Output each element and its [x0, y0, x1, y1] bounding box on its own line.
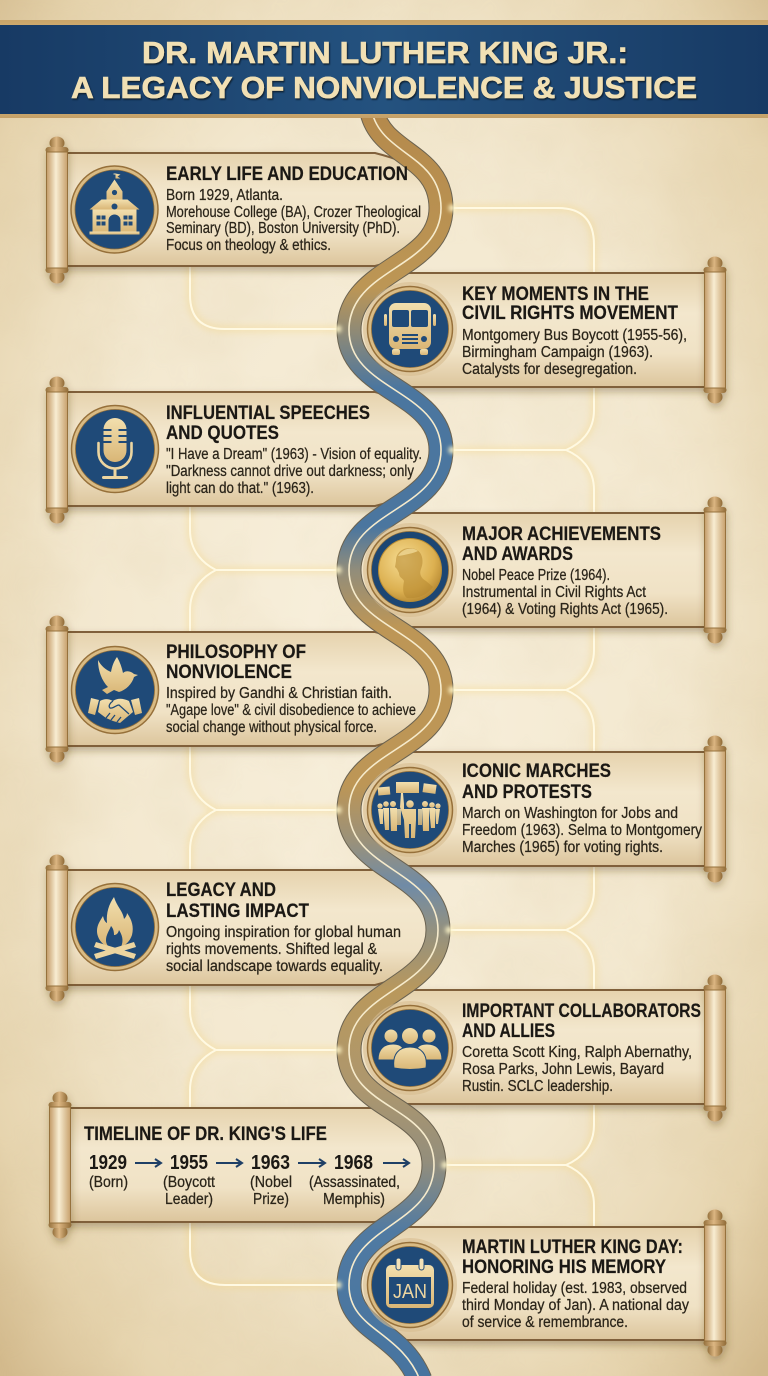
text: achievements: Instrumental in Civil Rights Act — [462, 584, 647, 601]
title text: DR. MARTIN LUTHER KING JR.: — [142, 35, 628, 70]
icon: group of people — [363, 1001, 457, 1095]
icon: flame — [72, 884, 158, 970]
text: philosophy: social change without physical force. — [166, 719, 377, 736]
text: legacy: LEGACY AND — [166, 880, 276, 901]
panel: timeline scroll — [62, 1108, 434, 1222]
timeline labels: (Nobel — [250, 1174, 292, 1191]
timeline heading: TIMELINE OF DR. KING'S LIFE — [84, 1124, 327, 1145]
panel: achievements scroll — [349, 513, 716, 627]
panel: philosophy scroll — [60, 632, 441, 746]
section: legacy and lasting impact — [72, 880, 401, 975]
timeline labels — [89, 1174, 400, 1208]
timeline labels: (Boycott — [163, 1174, 216, 1191]
title text: A LEGACY OF NONVIOLENCE & JUSTICE — [71, 70, 697, 105]
text: speeches — [166, 403, 422, 497]
timeline years — [89, 1151, 373, 1174]
icon: schoolhouse — [71, 166, 158, 253]
icon: bus — [363, 282, 457, 376]
section: marches and protests — [363, 761, 702, 857]
text: marches — [462, 761, 702, 856]
text: marches: March on Washington for Jobs and — [462, 805, 678, 822]
icon: nobel medal — [363, 523, 457, 617]
text: collaborators: IMPORTANT COLLABORATORS — [462, 1001, 701, 1022]
text: legacy: social landscape towards equality. — [166, 958, 383, 975]
panel: marches scroll — [349, 752, 716, 866]
text: collaborators — [462, 1001, 701, 1095]
text: MLK day: Federal holiday (est. 1983, observed — [462, 1280, 687, 1297]
timeline years: 1955 — [170, 1151, 208, 1174]
timeline labels: (Born) — [89, 1174, 128, 1191]
text: early life: Focus on theology & ethics. — [166, 237, 331, 254]
text: philosophy — [166, 642, 416, 736]
timeline labels: Memphis) — [323, 1191, 385, 1208]
text: speeches: AND QUOTES — [166, 423, 279, 444]
icon: January calendar: JAN — [393, 1281, 427, 1303]
text: early life — [166, 164, 421, 254]
section: speeches and quotes — [72, 403, 422, 497]
text: speeches: "I Have a Dream" (1963) - Vision of equality. — [166, 446, 422, 463]
timeline labels: Prize) — [253, 1191, 289, 1208]
text: MLK day: of service & remembrance. — [462, 1314, 628, 1331]
text: speeches: light can do that." (1963). — [166, 480, 314, 497]
icon: microphone — [72, 406, 158, 492]
text: philosophy: PHILOSOPHY OF — [166, 642, 306, 663]
section: key moments — [363, 282, 687, 378]
text: achievements: Nobel Peace Prize (1964). — [462, 567, 610, 584]
section: philosophy of nonviolence — [72, 642, 416, 736]
timeline years: 1929 — [89, 1151, 127, 1174]
text: early life: Seminary (BD), Boston University (PhD). — [166, 220, 400, 237]
timeline arrows — [135, 1159, 409, 1167]
panel: collaborators scroll — [349, 990, 716, 1104]
text: key moments: Birmingham Campaign (1963). — [462, 344, 653, 361]
text: philosophy: NONVIOLENCE — [166, 662, 292, 683]
scroll panels backgrounds — [60, 153, 716, 1340]
text: key moments: KEY MOMENTS IN THE — [462, 284, 649, 305]
timeline years: 1963 — [251, 1151, 290, 1174]
section: early life and education — [71, 164, 421, 254]
scroll rods — [46, 136, 726, 1356]
panel: legacy scroll — [60, 870, 438, 985]
icon: protest crowd — [363, 763, 457, 857]
panel: key moments scroll — [349, 273, 716, 387]
text: marches: AND PROTESTS — [462, 782, 592, 803]
text: legacy: rights movements. Shifted legal & — [166, 941, 378, 958]
winding road — [349, 112, 441, 1376]
text: collaborators: Rosa Parks, John Lewis, Bayard — [462, 1061, 664, 1078]
text: collaborators: Rustin. SCLC leadership. — [462, 1078, 613, 1095]
timeline labels: (Assassinated, — [309, 1174, 400, 1191]
text: MLK day — [462, 1237, 689, 1331]
icon: January calendar — [363, 1238, 457, 1332]
text: key moments — [462, 284, 687, 378]
timeline years: 1968 — [334, 1151, 373, 1174]
text: MLK day: third Monday of Jan). A national day — [462, 1297, 689, 1314]
text: early life: Born 1929, Atlanta. — [166, 187, 283, 204]
text: philosophy: Inspired by Gandhi & Christian faith. — [166, 685, 392, 702]
panel: speeches scroll — [60, 392, 441, 506]
section: timeline — [84, 1124, 409, 1208]
icon: dove and handshake — [72, 646, 158, 734]
text: legacy: Ongoing inspiration for global human — [166, 924, 401, 941]
text: achievements: MAJOR ACHIEVEMENTS — [462, 524, 661, 545]
text: philosophy: "Agape love" & civil disobedience to achieve — [166, 702, 416, 719]
section: collaborators and allies — [363, 1001, 701, 1095]
panel: early life scroll — [60, 153, 441, 266]
text: key moments: CIVIL RIGHTS MOVEMENT — [462, 303, 678, 324]
text: legacy: LASTING IMPACT — [166, 901, 309, 922]
text: speeches: "Darkness cannot drive out darkness; only — [166, 463, 414, 480]
text: marches: Freedom (1963). Selma to Montgomery — [462, 822, 702, 839]
text: collaborators: Coretta Scott King, Ralph Abernathy, — [462, 1044, 692, 1061]
text: MLK day: MARTIN LUTHER KING DAY: — [462, 1237, 683, 1258]
section: MLK day — [363, 1237, 689, 1332]
text: achievements — [462, 524, 668, 618]
panel: MLK day scroll — [349, 1227, 716, 1340]
text: achievements: (1964) & Voting Rights Act (1965). — [462, 601, 668, 618]
title banner — [0, 20, 768, 118]
text: achievements: AND AWARDS — [462, 544, 573, 565]
text: key moments: Montgomery Bus Boycott (1955-56), — [462, 327, 687, 344]
timeline labels: Leader) — [165, 1191, 213, 1208]
text: collaborators: AND ALLIES — [462, 1021, 555, 1042]
glowing connector lines — [190, 208, 594, 1285]
road glow points — [334, 204, 456, 1288]
text: marches: ICONIC MARCHES — [462, 761, 611, 782]
section: achievements and awards — [363, 523, 668, 618]
text: legacy — [166, 880, 401, 975]
text: speeches: INFLUENTIAL SPEECHES — [166, 403, 370, 424]
text: key moments: Catalysts for desegregation. — [462, 361, 637, 378]
text: MLK day: HONORING HIS MEMORY — [462, 1257, 666, 1278]
text: marches: Marches (1965) for voting rights. — [462, 839, 663, 856]
text: early life: EARLY LIFE AND EDUCATION — [166, 164, 408, 185]
text: early life: Morehouse College (BA), Crozer Theological — [166, 204, 421, 221]
title text — [71, 35, 697, 105]
